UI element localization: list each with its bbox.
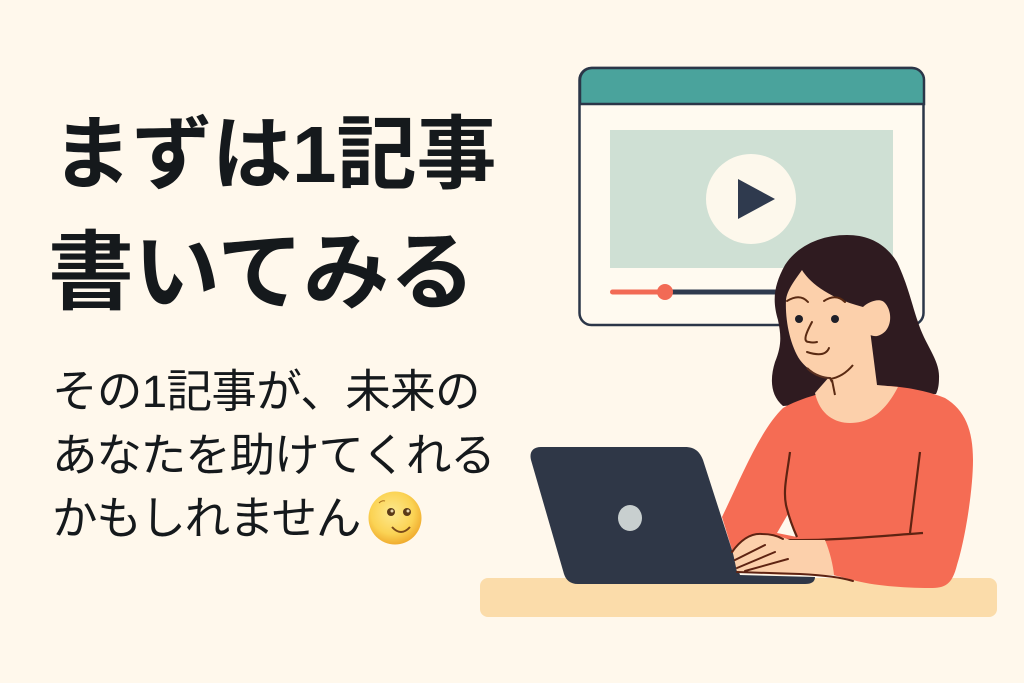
hand	[732, 534, 853, 581]
woman upper body	[722, 235, 973, 588]
smiley emoji	[368, 492, 422, 544]
subtitle text: かもしれません	[52, 493, 360, 544]
subtitle text: あなたを助けてくれる	[52, 430, 495, 480]
title line 2: 書いてみる	[48, 225, 475, 321]
subtitle text: その1記事が、未来の	[52, 366, 480, 417]
video player window	[580, 68, 924, 325]
subtitle text	[52, 366, 495, 544]
desk	[480, 578, 997, 617]
title line 1: まずは1記事	[52, 110, 496, 199]
laptop	[530, 447, 815, 584]
